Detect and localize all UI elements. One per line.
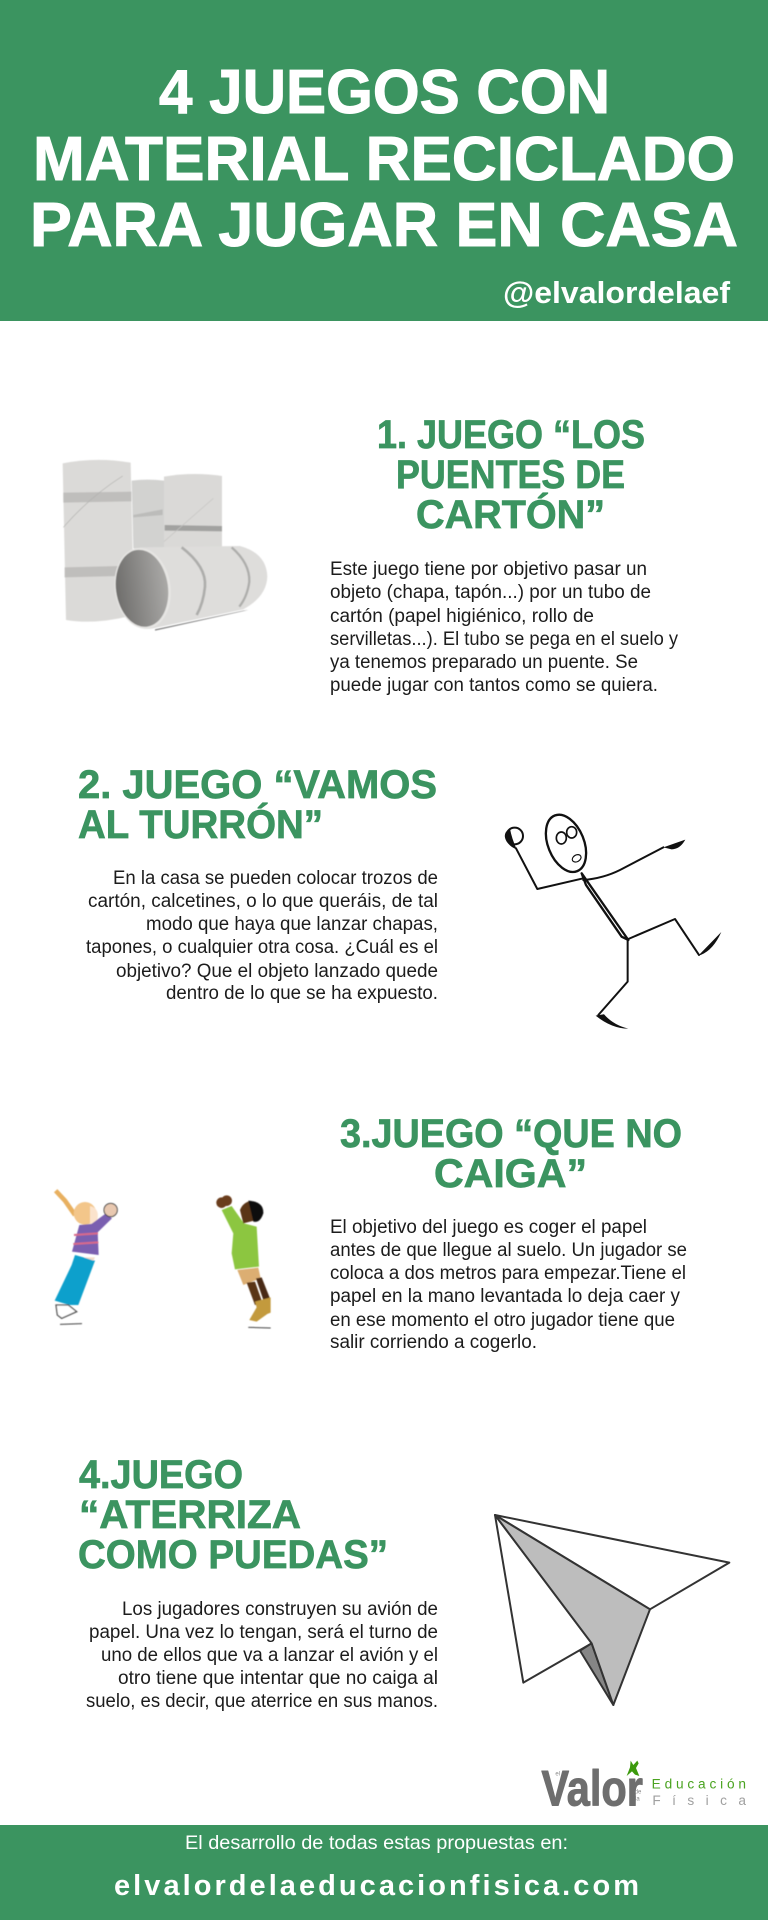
logo: el Valor de la Educación Física: de <box>635 1789 642 1795</box>
heading: juego 2 <box>78 763 437 847</box>
text block: juego 2: dentro de lo que se ha expuesto. <box>166 983 438 1004</box>
logo: el Valor de la Educación Física <box>541 1760 746 1816</box>
text block: juego 3: salir corriendo a cogerlo. <box>330 1332 537 1353</box>
text block: juego 3: antes de que llegue al suelo. Un jugador se <box>330 1240 687 1261</box>
text block: juego 4: uno de ellos que va a lanzar el avión y el <box>101 1645 438 1666</box>
heading: juego 1: PUENTES DE <box>396 453 625 497</box>
image: paper plane <box>495 1515 729 1705</box>
illustration: boy jumping <box>216 1195 271 1328</box>
text block: juego 4 <box>86 1599 438 1712</box>
text block: juego 2: objetivo? Que el objeto lanzado quede <box>116 961 438 982</box>
text block: juego 3: en ese momento el otro jugador tiene que <box>330 1310 675 1331</box>
panel: juego 3 <box>55 1112 687 1353</box>
logo: el Valor de la Educación Física: Valor <box>541 1760 643 1816</box>
panel: juego 2 <box>78 763 721 1029</box>
text block: juego 1: objeto (chapa, tapón...) por un tubo de <box>330 582 651 603</box>
footer caption: El desarrollo de todas estas propuestas en: <box>185 1832 568 1854</box>
text block: juego 2: En la casa se pueden colocar trozos de <box>113 868 438 889</box>
title: PARA JUGAR EN CASA <box>30 191 738 260</box>
logo: el Valor de la Educación Física: la <box>635 1797 640 1803</box>
text block: juego 4: papel. Una vez lo tengan, será el turno de <box>89 1622 438 1643</box>
text block: juego 1: cartón (papel higiénico, rollo de <box>330 606 594 627</box>
heading: juego 4: “ATERRIZA <box>79 1493 301 1537</box>
text block: juego 2 <box>86 868 438 1004</box>
text block: juego 2: modo que haya que lanzar chapas, <box>146 914 438 935</box>
text block: juego 2: tapones, o cualquier otra cosa. ¿Cuál es el <box>86 937 438 958</box>
footer banner <box>0 1825 768 1920</box>
heading: juego 2: AL TURRÓN” <box>78 801 323 847</box>
text block: juego 1: servilletas...). El tubo se pega en el suelo y <box>330 629 678 650</box>
logo: el Valor de la Educación Física: Educación <box>652 1776 746 1791</box>
text block: juego 3 <box>330 1217 687 1353</box>
logo: el Valor de la Educación Física: Física <box>652 1793 746 1808</box>
text block: juego 4: otro tiene que intentar que no caiga al <box>118 1668 438 1689</box>
heading: juego 3: CAIGA” <box>434 1152 587 1196</box>
heading: juego 3: 3.JUEGO “QUE NO <box>340 1112 682 1156</box>
heading: juego 4: COMO PUEDAS” <box>78 1533 388 1577</box>
heading: juego 1: 1. JUEGO “LOS <box>377 413 645 457</box>
title: MATERIAL RECICLADO <box>33 125 735 194</box>
title: 4 JUEGOS CON <box>159 58 610 127</box>
image: children jumping <box>55 1191 271 1328</box>
text block: juego 1: Este juego tiene por objetivo pasar un <box>330 559 647 580</box>
text block: juego 3: papel en la mano levantada lo deja caer y <box>330 1286 680 1307</box>
heading: juego 2: 2. JUEGO “VAMOS <box>78 763 437 807</box>
heading: juego 1 <box>377 413 645 537</box>
heading: juego 4 <box>78 1453 388 1577</box>
image: stick figure throwing <box>505 809 721 1029</box>
text block: juego 1: puede jugar con tantos como se quiera. <box>330 675 658 696</box>
heading: juego 1: CARTÓN” <box>416 491 605 537</box>
text block: juego 1: ya tenemos preparado un puente. Se <box>330 652 638 673</box>
panel: juego 4 <box>78 1453 729 1712</box>
illustration: girl jumping <box>55 1191 117 1324</box>
image: cardboard tubes <box>63 460 267 632</box>
icon: green jumping figure <box>627 1761 639 1776</box>
social handle: @elvalordelaef <box>503 275 731 310</box>
header banner <box>0 0 768 321</box>
text block: juego 3: coloca a dos metros para empezar.Tiene el <box>330 1263 686 1284</box>
title <box>30 58 738 260</box>
logo: el Valor de la Educación Física: el <box>555 1771 560 1777</box>
panel: juego 1 <box>63 413 678 696</box>
text block: juego 1 <box>330 559 678 696</box>
text block: juego 3: El objetivo del juego es coger el papel <box>330 1217 647 1238</box>
text block: juego 2: cartón, calcetines, o lo que queráis, de tal <box>88 891 438 912</box>
heading: juego 3 <box>340 1112 682 1196</box>
footer website: elvalordelaeducacionfisica.com <box>114 1870 639 1902</box>
text block: juego 4: Los jugadores construyen su avión de <box>122 1599 438 1620</box>
heading: juego 4: 4.JUEGO <box>79 1453 243 1497</box>
text block: juego 4: suelo, es decir, que aterrice en sus manos. <box>86 1691 438 1712</box>
